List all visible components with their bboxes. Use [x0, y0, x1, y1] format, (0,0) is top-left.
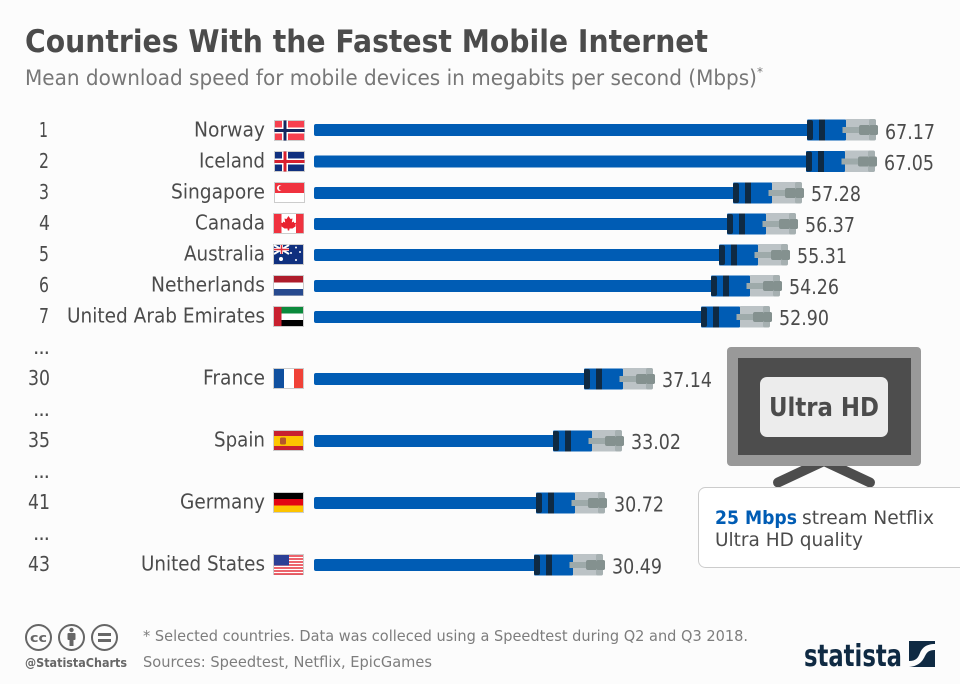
callout: Netflix requirement: Ultra HD quality	[715, 529, 863, 551]
ellipsis: ...	[33, 335, 50, 359]
row: Iceland	[39, 148, 934, 175]
row: Canada: 56.37	[805, 213, 855, 237]
row: Netherlands: 54.26	[789, 275, 839, 299]
row: United States: United States	[141, 552, 265, 576]
icon: license badges	[26, 625, 117, 650]
row: Canada: Canada	[195, 210, 265, 234]
row: Singapore: Singapore	[171, 180, 265, 204]
subtitle: Mean download speed for mobile devices in megabits per second (Mbps)	[25, 66, 757, 90]
callout: Netflix requirement: 25 Mbps	[715, 507, 797, 529]
icon: license badges: cc	[30, 631, 47, 645]
row: Germany: 41	[28, 490, 50, 514]
row: Singapore: 3	[39, 180, 49, 204]
sources: Sources: Speedtest, Netflix, EpicGames	[143, 653, 432, 671]
icon: Ultra HD television	[727, 347, 921, 482]
row: Norway	[39, 118, 935, 144]
row: United Arab Emirates: 52.90	[779, 306, 829, 330]
row: United States	[28, 552, 662, 578]
row: France: 37.14	[662, 368, 712, 392]
row: Iceland: Iceland	[199, 148, 265, 172]
callout: Netflix requirement	[698, 488, 960, 568]
row: Canada	[39, 210, 855, 237]
row: Germany	[28, 490, 664, 516]
callout: Netflix requirement: stream Netflix	[802, 507, 934, 529]
row: Iceland: 67.05	[884, 151, 934, 175]
row: Singapore: 57.28	[811, 182, 861, 206]
row: Australia: Australia	[184, 242, 265, 266]
row: Singapore	[39, 180, 861, 206]
row: Netherlands	[39, 272, 839, 299]
row: Spain: 33.02	[631, 430, 681, 454]
row: Norway: 67.17	[885, 120, 935, 144]
row: United Arab Emirates: 7	[39, 304, 49, 328]
row: United States: 43	[28, 552, 50, 576]
ellipsis: ...	[33, 459, 50, 483]
title: Countries With the Fastest Mobile Internet	[25, 24, 708, 60]
row: Germany: Germany	[180, 490, 265, 514]
row: Germany: 30.72	[614, 492, 664, 516]
icon: Ultra HD television: Ultra HD	[769, 393, 879, 423]
row: Spain: 35	[28, 428, 50, 452]
row: Australia	[39, 242, 847, 268]
logo: statista: statista	[804, 639, 902, 674]
row: Australia: 5	[39, 242, 49, 266]
row: Norway: 1	[39, 118, 48, 142]
footnote: * Selected countries. Data was colleced using a Speedtest during Q2 and Q3 2018.	[143, 627, 748, 645]
row: Netherlands: 6	[39, 273, 49, 297]
row: Spain	[28, 428, 681, 454]
row: United States: 30.49	[612, 554, 662, 578]
row: Netherlands: Netherlands	[151, 272, 265, 296]
row: United Arab Emirates: United Arab Emirates	[67, 304, 265, 328]
row: Iceland: 2	[39, 149, 49, 173]
ellipsis: ...	[33, 397, 50, 421]
row: France: 30	[28, 366, 50, 390]
row: Canada: 4	[39, 211, 50, 235]
credit handle: @StatistaCharts	[25, 656, 127, 670]
row: Spain: Spain	[214, 428, 265, 452]
row: Australia: 55.31	[797, 244, 847, 268]
subtitle asterisk: *	[757, 65, 763, 79]
row: Norway: Norway	[194, 118, 265, 142]
row: France	[28, 366, 712, 392]
row: United Arab Emirates	[39, 304, 829, 330]
row: France: France	[203, 366, 265, 390]
ellipsis: ...	[33, 521, 50, 545]
